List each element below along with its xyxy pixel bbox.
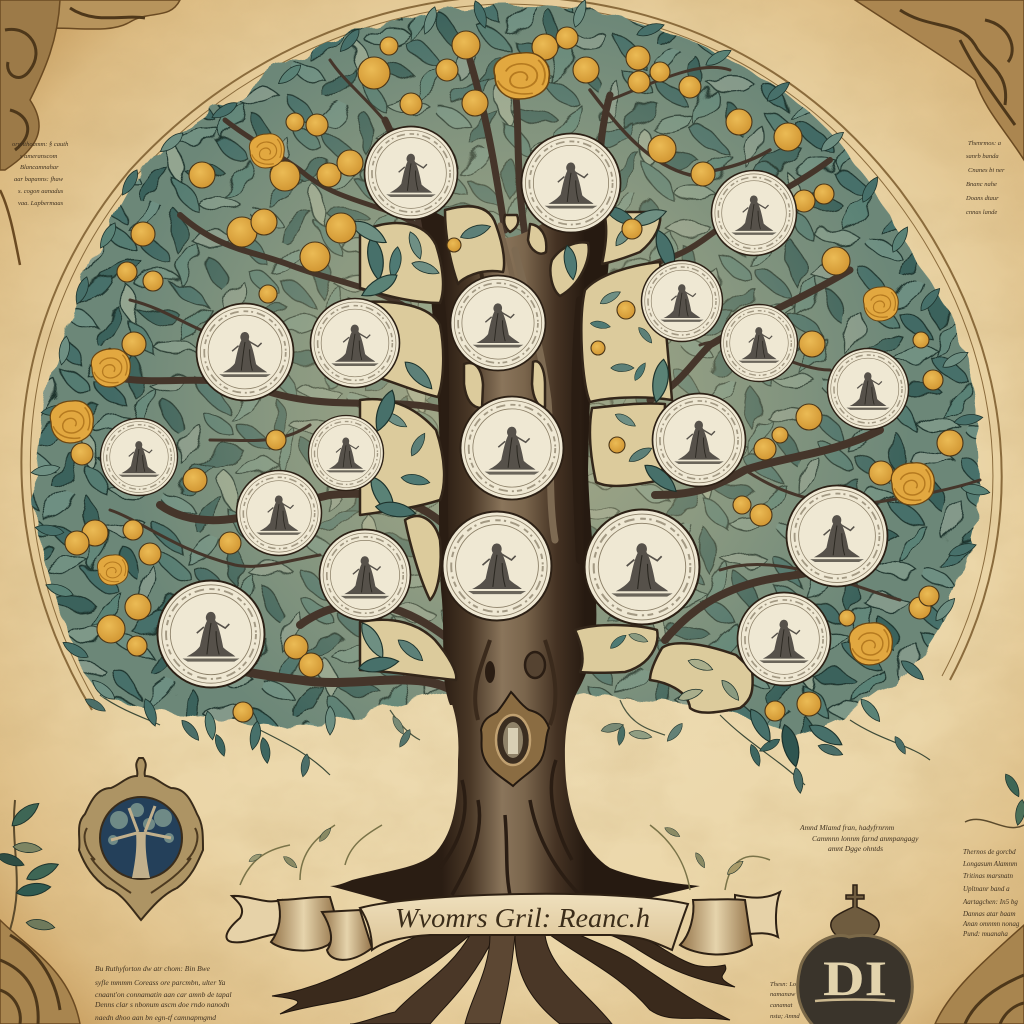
text block: beside crest: namanaw [770,991,796,998]
trunk bark detail [440,640,580,895]
edge leaves around the canopy [30,0,991,768]
thin circular frame around the tree [21,0,1002,710]
medallion 6 [720,304,798,382]
shield body [798,935,912,1024]
medallion 13 [100,418,178,496]
text block: lower centre notes [799,823,919,853]
golden roses [50,53,934,665]
banner right tail [735,892,780,937]
text block: upper right: sanrb banda [966,153,999,160]
text block: lower right: Aartagchen: In5 bg [962,898,1018,906]
hanging sprigs under the canopy [84,695,930,794]
right scroll roll [680,899,752,954]
text block: beside crest [770,981,800,1020]
medallion 20 [738,592,830,686]
medallion 5 [642,260,722,342]
medallion 7 [310,298,400,388]
medallion 14 [236,470,322,556]
outer side branches [110,60,980,696]
left scroll roll [271,897,336,951]
tree canopy foliage [35,6,982,735]
text block: upper right: cnnas lande [966,209,997,216]
medallion 17 [584,510,700,624]
trunk knot hollows [485,652,545,683]
banner left tail [226,896,290,942]
warm tint over the inner foliage [112,0,912,800]
text block: lower right: Tritinas marsnatn [963,872,1013,880]
text block: upper right: Cnanes bi ner [968,167,1005,174]
leaves softening the outer gap edges [348,202,681,675]
central trunk limbs core [418,195,609,705]
text block: upper right: Thenrmos: a [968,140,1001,147]
text block: beside crest: canamat [770,1002,793,1009]
text block: lower left: Denns clar s nbonum ascm doe rndo nanodn [94,1000,230,1009]
medallion 11 [652,394,746,486]
ornate corner: bottom left [0,799,80,1024]
medallion 9 [828,348,908,430]
medallion 19 [158,580,264,688]
text block: lower centre notes: Cammnn lonnm farnd anmpangagy [812,834,919,843]
medallion 1 [364,126,458,220]
crown and cross [831,885,879,941]
sparse leaves inside the gaps [382,220,742,703]
roots [272,935,735,1024]
medallion 15 [786,486,888,586]
foliage sprigs left of the banner [240,825,382,885]
text block: upper left: ornnthoamm: § cauth [12,141,68,148]
text block: upper right [965,140,1005,216]
text block: lower right: Longasum Alamnm [962,860,1017,868]
golden fruits [65,27,963,722]
ornate corner: top left [0,0,180,265]
text block: lower right [962,848,1020,938]
ornate corner: bottom right [935,772,1024,1024]
text block: upper left [12,141,68,207]
ornate corner: top right [855,0,1024,160]
medallion 8 [196,304,294,400]
medallion 4 [450,276,546,370]
medallion 16 [442,512,552,620]
text block: upper right: Doans dtaur [965,195,999,202]
medallion 3 [712,170,796,256]
medallion 12 [308,416,384,490]
medallion 2 [522,134,620,232]
medallion 18 [320,530,410,620]
second left roll [322,910,372,960]
text block: lower left [94,964,232,1022]
bark shading on the limbs [440,225,580,560]
foliage sprigs right of the banner [650,825,770,890]
text block: lower centre notes: Amnd Mlamd fran, hadyfrnrnm [799,823,895,832]
shield initials: DI [823,950,887,1006]
trunk crest [481,692,549,786]
text block: lower left: syfle mmmm Coreass ore parcmbn, ulter Ya [95,978,226,987]
text block: lower right: Pund: muanaha [962,930,1008,938]
text block: lower left: cnaant'on connamatin aan car amnb de tapal [95,990,232,999]
text block: upper left: vaa. Lapbermaas [18,200,64,207]
text block: lower right: Anan omnmn nonag [962,920,1020,928]
text block: upper left: Blancamnahar [20,164,59,171]
text block: lower right: Upltnanr band a [963,885,1010,893]
text block: upper left: aar bapanns: fhaw [14,176,64,183]
banner main ribbon [360,894,688,950]
text block: upper left: s. cogon aanadus [18,188,64,195]
text block: beside crest: Thesn: Lo [770,981,797,988]
text block: lower left: Bu Ruthyforton dw atr chom: Bin Bwe [95,964,211,973]
text block: lower right: Dannas atar baam [962,910,1016,918]
text block: lower left: naedn dhoo aan bn egn-tf camnapmgmd [95,1013,216,1022]
banner title text: Wvomrs Gril: Reanc.h [395,903,650,933]
medallion 10 [460,396,564,500]
text block: beside crest: nsta; Anmd [770,1013,800,1020]
text block: upper left: s ameranscom [20,153,58,160]
text block: lower centre notes: amnt Dgge ohntds [828,844,883,853]
lower trunk [330,679,700,905]
parchment gaps between the branches [360,206,753,713]
heraldic crest with crown and initials [798,885,912,1024]
heraldic emblem: tree roundel [79,758,203,920]
title banner [226,892,780,960]
text block: upper right: Bnanc nahe [966,181,997,188]
text block: lower right: Thernos de gorcbd [963,848,1016,856]
